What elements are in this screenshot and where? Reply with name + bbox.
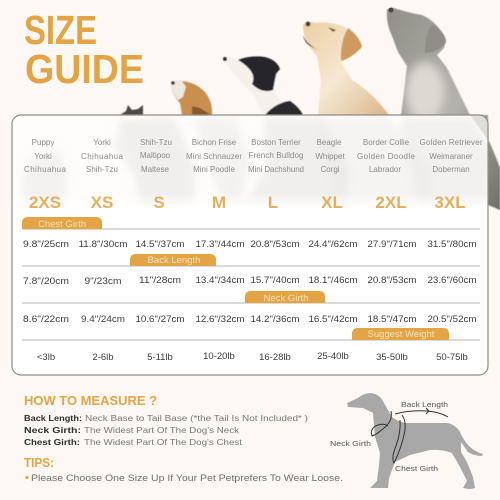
chest girth values: 11.8"/30cm: [78, 239, 128, 249]
neck girth values: 9.4"/24cm: [81, 314, 125, 324]
suggested weight values: 16-28lb: [259, 352, 291, 363]
tip text: Please Choose One Size Up If Your Pet Petprefers To Wear Loose.: [31, 473, 343, 484]
neck girth values: 12.6"/32cm: [196, 314, 244, 324]
breed names: Beagle: [317, 138, 342, 147]
suggested weight values: 50-75lb: [436, 352, 468, 363]
breed names: Maltipoo: [140, 151, 171, 160]
measuring instructions: Back Length:: [24, 414, 82, 423]
suggested weight values: 2-6lb: [92, 352, 114, 363]
breed names: Bichon Frise: [192, 138, 237, 147]
back length values: 20.8"/53cm: [368, 275, 416, 285]
size headers: 3XL: [434, 193, 466, 212]
row dividers: [22, 229, 480, 340]
diagram labels: Back Length: [401, 400, 448, 409]
breed names: Doberman: [432, 165, 470, 174]
dog: weimaraner: [387, 8, 500, 210]
measuring instructions: The Widest Part Of The Dog's Chest: [84, 438, 243, 447]
label: chest girth: Chest Girth: [38, 219, 86, 230]
size headers: S: [153, 193, 165, 212]
suggested weight values: 35-50lb: [376, 352, 408, 363]
suggested weight values: [37, 351, 468, 363]
suggested weight values: 25-40lb: [317, 351, 349, 362]
size headers: [29, 193, 466, 212]
chest girth values: 20.8"/53cm: [250, 239, 300, 249]
measuring instructions: The Widest Part Of The Dog's Neck: [84, 426, 240, 435]
back length values: 13.4"/34cm: [196, 275, 244, 285]
dog silhouette: [347, 393, 483, 489]
back length values: 9"/23cm: [84, 276, 122, 286]
chest girth values: 24.4"/62cm: [308, 239, 358, 249]
breed names: Labrador: [369, 165, 401, 174]
tips heading: TIPS:: [24, 455, 54, 470]
chest girth values: 27.9"/71cm: [368, 239, 416, 249]
measuring instructions: Neck Base to Tail Base (*the Tail Is Not Included* ): [85, 414, 308, 423]
size headers: M: [212, 193, 226, 212]
measuring diagram: [330, 393, 483, 489]
title: GUIDE: [25, 46, 144, 92]
size headers: XL: [321, 193, 343, 212]
table panel: [12, 115, 490, 375]
neck girth values: [23, 314, 476, 324]
breed names: Puppy: [32, 138, 54, 147]
how to measure heading: HOW TO MEASURE ?: [24, 393, 157, 408]
breed names: Yorki: [34, 152, 52, 161]
back length values: 23.6"/60cm: [428, 275, 476, 285]
label: suggest weight: [352, 328, 449, 340]
breed names: Weimaraner: [429, 152, 473, 161]
size headers: 2XS: [29, 193, 61, 212]
neck girth values: 8.6"/22cm: [23, 314, 69, 324]
dog: border collie: [223, 56, 303, 115]
measuring instructions: [24, 414, 308, 447]
breed names: [24, 138, 483, 174]
suggested weight values: 5-11lb: [147, 352, 173, 363]
breed names: Shih-Tzu: [86, 165, 118, 174]
measuring instructions: Chest Girth:: [24, 438, 80, 447]
label: back length: Back Length: [148, 255, 200, 266]
dog: labrador: [303, 22, 389, 115]
breed names: Chihuahua: [81, 152, 124, 161]
ghost dogs behind table: [26, 119, 487, 201]
neck girth values: 14.2"/36cm: [250, 314, 300, 324]
breed names: Corgi: [320, 165, 340, 174]
back length values: 11"/28cm: [139, 275, 181, 285]
breed names: French Bulldog: [248, 151, 304, 160]
title: SIZE: [24, 7, 97, 53]
size headers: 2XL: [375, 193, 407, 212]
suggested weight values: 10-20lb: [203, 351, 235, 362]
diagram labels: [330, 400, 448, 473]
suggested weight values: <3lb: [37, 352, 55, 363]
label: neck girth: [245, 291, 325, 304]
girth rings: [371, 408, 448, 463]
breed names: Chihuahua: [24, 165, 67, 174]
breed names: Yorki: [93, 138, 111, 147]
dog: beagle: [171, 80, 212, 115]
title: [24, 7, 144, 92]
label: suggest weight: Suggest Weight: [368, 329, 435, 340]
breed names: Golden Doodle: [357, 152, 416, 161]
breed names: Shih-Tzu: [140, 138, 172, 147]
breed names: Maltese: [141, 165, 170, 174]
back length values: 18.1"/46cm: [308, 275, 358, 285]
back length values: 7.8"/20cm: [23, 276, 69, 286]
label: back length: [130, 254, 216, 266]
breed names: Mini Schnauzer: [186, 152, 242, 161]
breed names: Mini Poodle: [193, 165, 235, 174]
back length values: [23, 275, 476, 286]
chest girth values: 14.5"/37cm: [136, 239, 184, 249]
breed names: Golden Retriever: [420, 138, 483, 147]
label: neck girth: Neck Girth: [264, 293, 308, 304]
neck girth values: 18.5"/47cm: [368, 314, 416, 324]
chest girth values: 31.5"/80cm: [428, 239, 476, 249]
chest girth values: 17.3"/44cm: [196, 239, 244, 249]
breed names: Border Collie: [363, 138, 410, 147]
breed names: Boston Terrier: [251, 138, 301, 147]
chest girth values: 9.8"/25cm: [23, 239, 69, 249]
chest girth values: [23, 239, 476, 249]
diagram labels: Neck Girth: [330, 439, 371, 448]
size headers: L: [268, 193, 278, 212]
breed names: Mini Dachshund: [248, 165, 304, 174]
neck girth values: 10.6"/27cm: [136, 314, 184, 324]
breed names: Whippet: [315, 152, 345, 161]
diagram labels: Chest Girth: [395, 464, 438, 473]
neck girth values: 16.5"/42cm: [308, 314, 358, 324]
neck girth values: 20.5"/52cm: [428, 314, 476, 324]
back length values: 15.7"/40cm: [250, 275, 300, 285]
dog: small black-eared dog: [120, 105, 143, 115]
measuring instructions: Neck Girth:: [24, 426, 81, 435]
size headers: XS: [91, 193, 113, 212]
label: chest girth: [22, 217, 102, 230]
